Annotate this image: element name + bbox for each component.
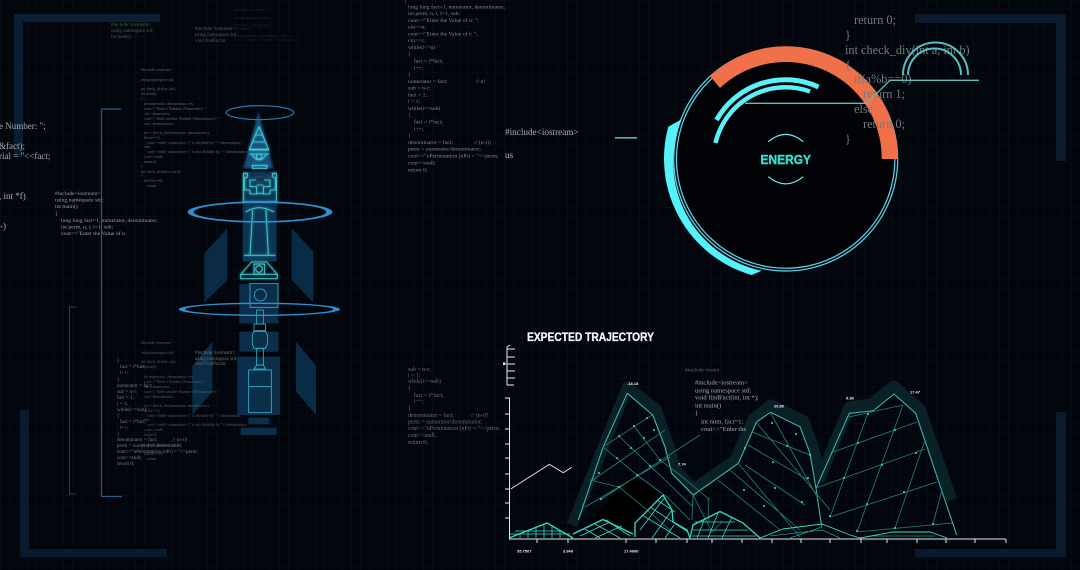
corner bracket: bottom left — [20, 410, 167, 557]
code: tiny block lower: cout<<"Enter a Number (Numerator): "; — [144, 380, 207, 384]
code: block left of chart: cout<<"nPermutation (nPr) = "<<perm; — [408, 425, 500, 432]
rocket: lower stages — [249, 283, 278, 413]
code: center top permutation block: return 0; — [408, 168, 428, 174]
code: tiny block lower: using namespace std; — [141, 351, 174, 355]
code: cropped left edge: rial = "<<fact; — [0, 151, 50, 161]
corner bracket: bottom right — [915, 412, 1066, 557]
code: top left small include block: #include<iostream> — [111, 23, 151, 28]
code: tiny block beside rocket: int main() — [141, 92, 157, 96]
code: tiny block lower: return 0; — [144, 433, 157, 437]
code: center top permutation block: long long fact=1, numerator, denominator; — [408, 4, 505, 10]
gauge: black interior — [678, 51, 894, 267]
code: center top permutation block: { — [408, 52, 411, 58]
code: block lower left: i++; — [120, 370, 129, 376]
chart title: EXPECTED TRAJECTORY — [527, 330, 654, 344]
code: very faint block: #include<iostream> — [235, 7, 268, 12]
code: block lower left: cout<<endl; — [117, 455, 142, 461]
chart: peak value labels: 7.74 — [678, 462, 687, 466]
code: include block over fin — [195, 351, 238, 367]
code: faint lines over rocket: cin>>n; — [255, 180, 267, 184]
code: include block by bracket: { — [55, 211, 58, 217]
code: include block by bracket: #include<iostream> — [55, 191, 101, 197]
code: tiny block lower: cout<<"Enter another Number (Denominator): "; — [144, 390, 220, 394]
code: tiny block lower: int check_div(int a, int b) — [141, 443, 181, 448]
code: tiny block lower: #include<iostream> — [141, 341, 173, 345]
code: center top permutation block: { — [408, 113, 411, 119]
rocket: background column — [237, 112, 280, 435]
chart: peak value labels: 20.80 — [774, 404, 785, 408]
code: center top permutation block: cin>>r; — [408, 38, 425, 44]
chart: x axis value labels: 17.4690 — [624, 548, 639, 554]
rocket illustration — [179, 106, 340, 435]
half-circle indicator — [903, 42, 968, 75]
code: center top permutation block: cout<<"Enter the Value of n: "; — [408, 17, 479, 24]
chart: peak value labels: -18.18 — [627, 381, 639, 386]
code: block lower left: fact = i*fact; — [120, 418, 147, 425]
rocket: top ring — [226, 106, 294, 120]
chart: x axis value labels — [517, 548, 639, 554]
code: cropped left edge — [0, 121, 50, 231]
code: block left of chart: perm = numerator/denominator; — [408, 420, 483, 426]
code: block lower left: return 0; — [117, 461, 135, 467]
code: include block by bracket: using namespace std; — [55, 198, 104, 204]
code: tiny block beside rocket: res = check_div(numerator, denominator); — [144, 131, 210, 136]
chart: x axis value labels: 3.849 — [563, 548, 574, 554]
code: tiny block lower: else — [144, 418, 150, 422]
code: block lower left: while(i<=sub) — [117, 406, 146, 413]
code: block left of chart: while(i<=sub) — [408, 378, 441, 385]
code: block lower left: fact = i*fact; — [120, 363, 147, 370]
code: block left of chart: i++; — [414, 399, 424, 405]
code: block lower left: } — [117, 377, 119, 383]
code: top right large block: return 0; — [854, 13, 896, 27]
code: tiny block beside rocket: else — [144, 145, 150, 149]
code: top right large block: return 1; — [863, 87, 905, 101]
code: center top permutation block: numerator = fact; // n! — [408, 78, 485, 85]
code: center top permutation block: sub = n-r; — [408, 86, 431, 92]
code: include block by bracket: int main() — [55, 203, 78, 210]
dash connector — [615, 137, 637, 139]
code: tiny block beside rocket: { — [141, 174, 143, 178]
code: block lower left: i = 1; — [117, 401, 128, 407]
code: block lower left: { — [117, 358, 119, 364]
code: include block by bracket — [55, 191, 158, 237]
code: center top permutation block: while(i<=sub) — [408, 105, 440, 112]
code: top right large block: return 0; — [863, 117, 905, 131]
left bracket large — [102, 109, 122, 496]
code: include snippet over chart: cout<<"Enter the — [701, 426, 747, 433]
code: very faint block: cout<<"Enter a Number (Numerator): "; — [235, 37, 299, 42]
code: center top permutation block: cin>>n; — [408, 25, 426, 31]
code: tiny block beside rocket: cout<<endl; — [144, 155, 163, 159]
code: block lower left: numerator = fact; — [117, 382, 153, 389]
code: block lower left: } — [117, 431, 119, 437]
code: include block over fin: #include<iostream> — [195, 351, 235, 356]
gauge: orange arc — [710, 46, 898, 159]
code: center top permutation block: fact = i*fact; — [414, 119, 444, 126]
code: tiny block beside rocket: return — [147, 184, 156, 188]
code: tiny block beside rocket: cout<<endl<<numerator<<" is not divisible by "<<denominator; — [147, 150, 248, 154]
code: block lower left: perm = numerator/denominator; — [117, 443, 183, 449]
code: tiny block lower: int check_div(int, int); — [141, 360, 176, 365]
code: center top permutation block: cout<<"Enter the Value of r: "; — [408, 31, 478, 38]
code: block left of chart: return 0; — [408, 440, 428, 446]
code: tiny block lower — [141, 341, 248, 461]
chart: black occlusion — [590, 477, 660, 533]
code: block lower left: cout<<"nPermutation (nPr) = "<<perm; — [117, 448, 198, 455]
code: center top permutation block: while(i<=n) — [408, 44, 435, 51]
code: block lower left: fact = 1; — [117, 394, 135, 401]
code: center top permutation block: i++; — [414, 66, 424, 72]
code: include block over fin: void findFactor — [195, 362, 226, 367]
code: include snippet over chart: #include<iostre — [685, 368, 720, 374]
chart: y axis — [505, 398, 510, 539]
code: include block over fin: using namespace std; — [195, 357, 238, 362]
chart: peak value labels: 9.98 — [846, 396, 855, 400]
code: faint lines over rocket — [255, 175, 277, 184]
code: tiny block lower: if(a%b==0) — [144, 452, 163, 456]
code: block lower left: denominator = fact; // (n-r)! — [117, 436, 188, 443]
code: center top permutation block: denominator = fact; // (n-r)! — [408, 139, 491, 146]
code: center top permutation block: cout<<"nPermutation (nPr) = "<<perm; — [408, 153, 499, 160]
code: top right large block: } — [845, 132, 851, 146]
code: tiny block lower: cout<<endl; — [144, 428, 163, 432]
code: block left of chart — [408, 367, 500, 446]
code: tiny block beside rocket: using namespace std; — [141, 78, 174, 82]
code: top right large block: { — [845, 58, 851, 72]
code: tiny block lower: int main() — [141, 365, 157, 369]
code: center top permutation block: i = 1; — [408, 99, 420, 105]
code: include block by bracket: cout<<"Enter the Value of n — [61, 230, 125, 237]
code: tiny block lower: cin>>numerator; — [144, 385, 170, 389]
code: center top permutation block: fact = i*fact; — [414, 58, 444, 65]
rocket: middle ring — [188, 201, 332, 223]
code: tiny block beside rocket: int numerator, denominator, res; — [144, 102, 194, 107]
code: tiny block lower: cout<<endl<<numerator<<" is not divisible by "<<denominator; — [147, 423, 248, 427]
chart: mountain outlines — [578, 393, 957, 535]
chart: mesh lines — [585, 405, 952, 537]
code: tiny block beside rocket: cout<<"Enter another Number (Denominator): "; — [144, 117, 220, 121]
code: top left small include block: int main() — [111, 35, 131, 40]
code: tiny block lower: cout<<endl<<numerator<<" is divisible by "<<denominator; — [147, 414, 242, 418]
code: tiny block beside rocket: #include<iostream> — [141, 68, 173, 72]
code: block lower left: i++; — [120, 425, 129, 431]
rocket: fins — [192, 228, 316, 415]
chart: peak value labels: 17.47 — [910, 390, 921, 394]
code: center top permutation block: } — [408, 72, 411, 78]
code: tiny block beside rocket: } — [141, 165, 143, 169]
code: tiny block beside rocket: cin>>denominator; — [144, 122, 174, 126]
code: top right large block: else — [854, 102, 874, 116]
code: very faint block: int check_div(int, int); — [235, 22, 271, 28]
code: tiny block beside rocket: { — [141, 97, 143, 101]
code: top right large block — [845, 13, 970, 146]
code: top right large block: } — [845, 28, 851, 42]
code: block left of chart: { — [408, 386, 411, 392]
code: center top permutation block: } — [408, 133, 411, 139]
leader line from gauge — [745, 80, 979, 103]
code: block left of chart: } — [408, 406, 411, 412]
code: include block by bracket: int perm, n, r, i=1, sub; — [61, 224, 114, 230]
code: include snippet over chart: void findFact(int, int *); — [695, 394, 759, 402]
code: center include snippet — [505, 127, 579, 160]
code: very faint block: using namespace std; — [235, 15, 269, 20]
code: block left of chart: i = 1; — [408, 373, 421, 379]
chart: x axis — [509, 539, 1006, 543]
gauge: double thin rings — [674, 47, 898, 271]
code: tiny block lower: { — [141, 447, 143, 451]
code: include snippet over chart: int num, fact=1; — [701, 418, 744, 426]
code: tiny block beside rocket: int check_div(int a, int b) — [141, 170, 181, 175]
code: include snippet over chart: int main() — [695, 402, 721, 410]
code: very faint block — [235, 7, 299, 42]
code: tiny block beside rocket: return 0; — [144, 160, 157, 164]
chart: white trend line — [511, 464, 572, 489]
code: top small include block two — [195, 27, 238, 44]
rocket: lower ring — [179, 303, 340, 316]
gauge: energy label: ENERGY — [760, 152, 811, 167]
gauge: small arcs around label — [768, 134, 803, 184]
gauge: thick cyan arc — [664, 119, 762, 275]
code: center top permutation block: perm = numerator/denominator; — [408, 147, 481, 153]
code: include snippet over chart: using namespace std; — [695, 388, 751, 394]
code: center top permutation block: i++; — [414, 127, 424, 133]
code: center include snippet: us — [505, 150, 514, 160]
code: include block by bracket: long long fact=1, numerator, denominator; — [61, 217, 158, 224]
code: very faint block: int main() — [235, 26, 252, 31]
code: include snippet over chart: { — [695, 410, 698, 417]
gauge: inner cyan arcs — [716, 80, 818, 143]
code: tiny block beside rocket: cout<<"Enter a Number (Numerator): "; — [144, 107, 207, 111]
code: tiny block lower: res = check_div(numerator, denominator); — [144, 404, 210, 409]
chart: expected trajectory — [504, 330, 1006, 554]
code: top small include block two: #include<iostream> — [195, 27, 235, 32]
corner bracket: top right — [915, 14, 1066, 161]
code: block lower left: { — [117, 413, 119, 419]
energy gauge — [664, 46, 898, 275]
chart: mountain glow band — [572, 386, 952, 525]
code: block left of chart: cout<<endl; — [408, 433, 436, 439]
chart: bright base mountains with hatch — [509, 495, 947, 538]
code: tiny block lower: if(res==1) — [144, 409, 161, 413]
code: include snippet over chart: #include<iostream> — [695, 380, 748, 386]
code: center include snippet: #include<iostream> — [505, 127, 579, 137]
rocket: upper glowing stages — [241, 127, 277, 279]
code: tiny block beside rocket: int check_div(int, int); — [141, 87, 176, 92]
left bracket small — [70, 307, 76, 494]
code: tiny block beside rocket: if(res==1) — [144, 136, 161, 140]
code: center top permutation block: int perm, n, r, i=1, sub; — [408, 11, 461, 17]
chart: mini scale — [504, 345, 515, 385]
code: top right large block: int check_div(int a, int b) — [845, 43, 970, 57]
code: include snippet over chart — [685, 368, 759, 433]
code: block left of chart: sub = n-r; — [408, 367, 431, 373]
code: top left small include block: using namespace std; — [111, 29, 154, 34]
code: tiny block beside rocket: cout<<endl<<numerator<<" is divisible by "<<denominator; — [147, 141, 242, 145]
code: block left of chart: denominator = fact; // (n-r)! — [408, 412, 488, 419]
chart: peak value labels — [627, 381, 921, 466]
code: tiny block lower: return — [147, 457, 156, 461]
code: tiny block beside rocket: cin>>numerator; — [144, 112, 170, 116]
code: top small include block two: using namespace std; — [195, 33, 238, 38]
code: faint lines over rocket: cout<<"Enter — [255, 175, 277, 179]
code: center top permutation block: fact = 1; — [408, 92, 427, 99]
code: tiny block beside rocket: if(a%b==0) — [144, 179, 163, 183]
code: top small include block two: void findFactor — [195, 39, 226, 44]
code: top left small include block — [111, 23, 154, 40]
code: block lower left — [117, 358, 198, 467]
code: center top permutation block: cout<<endl; — [408, 161, 436, 167]
code: tiny block lower: cin>>denominator; — [144, 395, 174, 399]
code: block left of chart: fact = i*fact; — [414, 392, 444, 399]
code: center top permutation block — [404, 0, 505, 174]
code: top right large block: if(a%b==0) — [854, 72, 912, 86]
code: tiny block lower: int numerator, denominator, res; — [144, 375, 194, 380]
code: block lower left: sub = n-r; — [117, 389, 137, 395]
code: very faint block: int numerator, denominator, res; — [235, 33, 286, 39]
code: cropped left edge: e Number: "; — [0, 121, 46, 131]
corner bracket: top left — [14, 14, 160, 157]
chart: x axis value labels: 35.7507 — [517, 548, 532, 554]
chart: mesh nodes — [598, 413, 934, 532]
code: tiny block beside rocket — [141, 68, 248, 188]
